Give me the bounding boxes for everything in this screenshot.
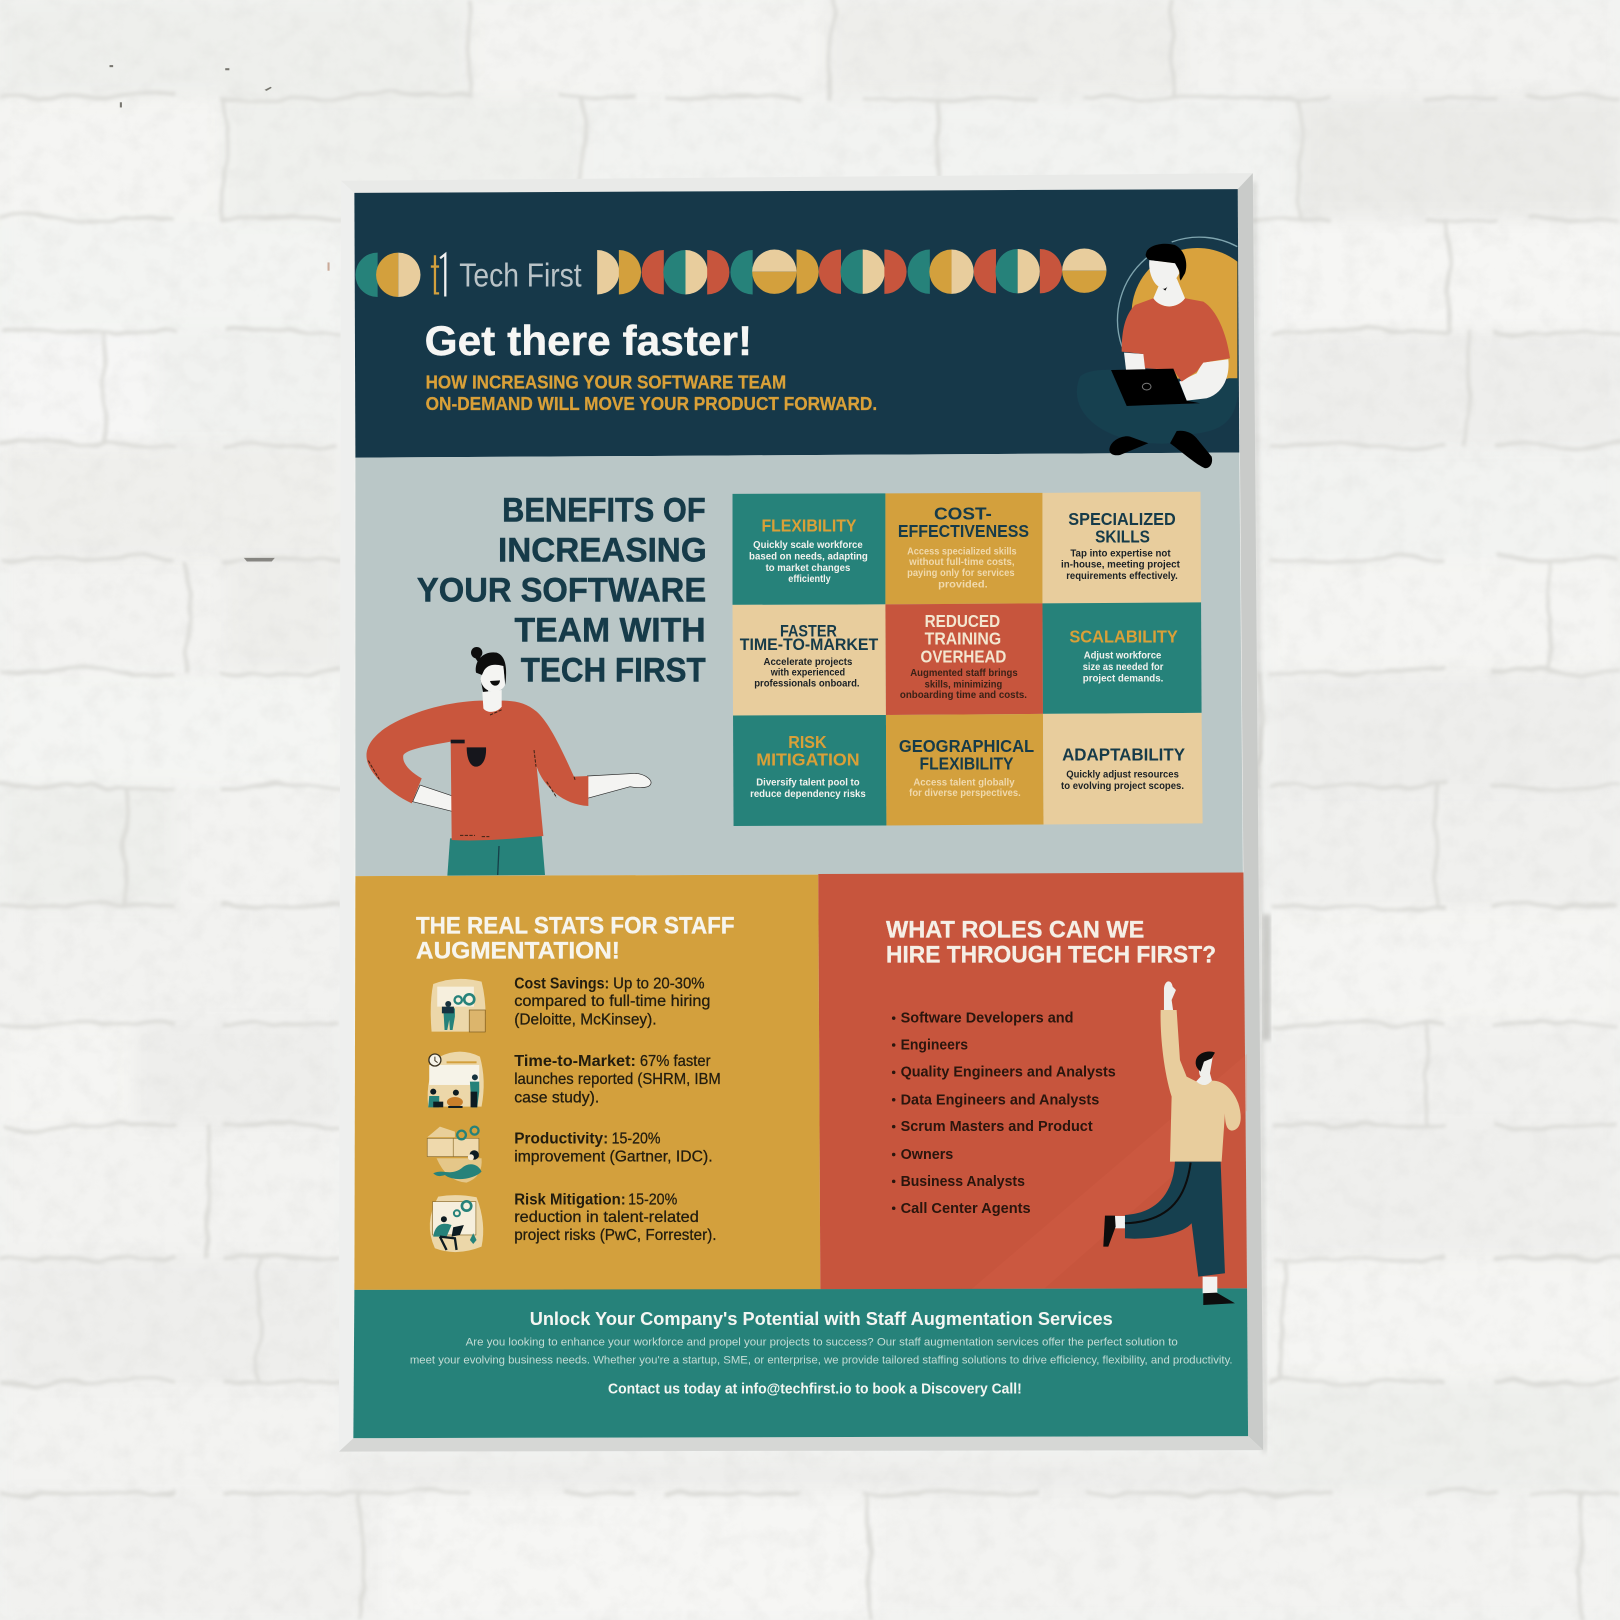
footer heading: Unlock Your Company's Potential with Staff Augmentation Services	[530, 1308, 1113, 1329]
heading: roles: HIRE THROUGH TECH FIRST?	[886, 942, 1216, 969]
roles panel background	[818, 873, 1247, 1289]
decorative circle row	[597, 248, 1107, 294]
roles list: Business Analysts	[901, 1174, 1025, 1190]
footer description: meet your evolving business needs. Whether you're a startup, SME, or enterprise, we provide tailored staffing solutions to drive efficiency, flexibility, and productivity.	[410, 1354, 1233, 1366]
contact line: Contact us today at info@techfirst.io to book a Discovery Call!	[608, 1381, 1022, 1397]
arm left	[1124, 353, 1145, 370]
sweater	[366, 701, 588, 840]
legs	[1077, 370, 1238, 444]
cell: faster time-to-market: TIME-TO-MARKET	[740, 635, 878, 654]
stat: cost savings: Up to 20-30%	[613, 975, 705, 992]
stat: productivity: improvement (Gartner, IDC).	[514, 1149, 713, 1166]
mouth	[1161, 287, 1167, 291]
hair	[1146, 244, 1186, 281]
roles panel light streak	[971, 1054, 1247, 1289]
logo	[355, 253, 582, 297]
header panel	[354, 189, 1239, 458]
cell: risk mitigation: reduce dependency risks	[750, 789, 866, 800]
roles list: Owners	[901, 1147, 953, 1163]
cell: reduced training overhead	[885, 603, 1043, 715]
heading: benefits: INCREASING	[498, 532, 707, 570]
cell: scalability: size as needed for	[1083, 662, 1163, 673]
left hand	[413, 785, 467, 812]
shirt	[1122, 298, 1230, 382]
stat: risk mitigation: project risks (PwC, Forrester).	[514, 1227, 716, 1244]
roles list: Call Center Agents	[901, 1201, 1031, 1217]
cell: adaptability: to evolving project scopes.	[1061, 781, 1184, 792]
illustration: man raising hand	[1103, 981, 1241, 1305]
benefits grid	[733, 492, 1203, 826]
logo circle	[376, 253, 420, 297]
illustration: man gesturing	[366, 647, 651, 876]
neck	[482, 690, 502, 712]
cell: scalability	[1042, 602, 1202, 714]
cell: risk mitigation: Diversify talent pool to	[756, 778, 860, 789]
cell: scalability: Adjust workforce	[1084, 651, 1161, 662]
heading: stats: THE REAL STATS FOR STAFF	[416, 912, 735, 939]
cell: risk mitigation: MITIGATION	[756, 750, 860, 770]
cell: specialized skills	[1042, 492, 1201, 603]
gold circle	[1132, 248, 1237, 379]
stat: time-to-market: 67% faster	[640, 1053, 711, 1070]
face	[1149, 260, 1179, 289]
cell: specialized skills: SPECIALIZED	[1068, 509, 1176, 529]
stats panel background	[354, 875, 820, 1290]
heading: benefits: TECH FIRST	[521, 652, 706, 690]
cell: flexibility	[733, 493, 885, 605]
cell: cost-effectiveness: EFFECTIVENESS	[898, 521, 1029, 541]
subtitle: ON-DEMAND WILL MOVE YOUR PRODUCT FORWARD.	[426, 393, 877, 414]
stat: productivity	[514, 1130, 713, 1166]
cell: cost-effectiveness	[885, 493, 1042, 604]
roles list: Scrum Masters and Product	[901, 1119, 1093, 1135]
cell: flexibility: FLEXIBILITY	[761, 516, 857, 536]
cell: flexibility: to market changes	[766, 563, 851, 574]
roles list	[892, 1011, 1116, 1217]
hair	[473, 652, 506, 685]
stat: cost savings: (Deloitte, McKinsey).	[514, 1011, 657, 1028]
cell: reduced training overhead: TRAINING	[925, 629, 1001, 649]
sweater	[1161, 1010, 1241, 1162]
thin ring	[1118, 237, 1237, 347]
cell: reduced training overhead: OVERHEAD	[921, 646, 1006, 666]
stat: cost savings: compared to full-time hiring	[514, 993, 711, 1010]
heading: stats	[416, 912, 735, 964]
cell: risk mitigation: RISK	[788, 732, 827, 752]
right hand	[587, 773, 651, 798]
cell: geographical flexibility: for diverse perspectives.	[909, 788, 1021, 799]
sweater details	[368, 709, 575, 837]
cell: specialized skills: Tap into expertise not	[1070, 548, 1171, 559]
cell: scalability: SCALABILITY	[1069, 627, 1178, 647]
cell: scalability: project demands.	[1083, 673, 1163, 684]
roles list: Engineers	[901, 1038, 968, 1054]
cell: specialized skills: requirements effectively.	[1066, 571, 1178, 582]
stat: risk mitigation	[514, 1191, 716, 1244]
stat: time-to-market: Time-to-Market:	[514, 1053, 636, 1070]
cell: faster time-to-market	[733, 604, 886, 715]
stat: cost savings: Cost Savings:	[514, 975, 609, 992]
cell: faster time-to-market: Accelerate projects	[764, 657, 853, 668]
cell: cost-effectiveness: Access specialized skills	[907, 546, 1017, 557]
roles list: Quality Engineers and Analysts	[901, 1065, 1116, 1081]
icon: time-to-market	[428, 1052, 484, 1108]
roles list: Data Engineers and Analysts	[901, 1092, 1099, 1108]
cell: flexibility: efficiently	[788, 574, 831, 585]
face	[481, 665, 505, 692]
hair	[1196, 1051, 1215, 1072]
stat: risk mitigation: Risk Mitigation:	[514, 1191, 626, 1208]
front sock and shoe	[1203, 1277, 1217, 1293]
cell: geographical flexibility: GEOGRAPHICAL	[899, 736, 1034, 756]
laptop	[1111, 369, 1200, 406]
cell: faster time-to-market: FASTER	[780, 621, 837, 640]
subtitle: HOW INCREASING YOUR SOFTWARE TEAM	[426, 371, 786, 392]
stat: cost savings	[514, 975, 711, 1028]
stat: time-to-market: case study).	[514, 1089, 599, 1106]
logo half circle	[355, 253, 378, 297]
poster	[353, 189, 1248, 1438]
stat: productivity: Productivity:	[514, 1130, 608, 1147]
hair behind neck	[481, 680, 488, 693]
cell: geographical flexibility	[886, 714, 1043, 825]
stat: productivity: 15-20%	[612, 1130, 661, 1147]
stats list	[514, 975, 721, 1244]
cell: adaptability	[1043, 713, 1203, 824]
arm right	[1179, 359, 1229, 401]
cell: geographical flexibility: Access talent globally	[913, 778, 1015, 789]
heading: benefits: BENEFITS OF	[502, 492, 706, 530]
logo mark	[431, 254, 445, 297]
cell: cost-effectiveness: paying only for services	[907, 568, 1015, 579]
cell: specialized skills: SKILLS	[1095, 526, 1150, 546]
raised hand	[1164, 981, 1176, 1012]
heading: roles: WHAT ROLES CAN WE	[886, 917, 1144, 944]
stat: time-to-market	[514, 1053, 721, 1106]
cell: flexibility: Quickly scale workforce	[753, 540, 863, 551]
footer text	[410, 1308, 1233, 1397]
cell: flexibility: based on needs, adapting	[749, 551, 868, 562]
stat: risk mitigation: reduction in talent-related	[514, 1209, 699, 1226]
footer panel background	[353, 1288, 1248, 1438]
cell: faster time-to-market: with experienced	[770, 668, 845, 679]
heading: benefits	[417, 492, 707, 690]
cell: adaptability: ADAPTABILITY	[1062, 744, 1185, 764]
cell: cost-effectiveness: without full-time costs,	[908, 557, 1015, 568]
pocket	[467, 747, 486, 767]
stat: risk mitigation: 15-20%	[628, 1191, 677, 1208]
poster frame	[339, 173, 1263, 1452]
cell: geographical flexibility: FLEXIBILITY	[920, 754, 1014, 774]
mouth	[490, 680, 500, 686]
footer description: Are you looking to enhance your workforce and propel your projects to success? Our staff augmentation services offer the perfect solution to	[466, 1337, 1178, 1349]
cell: reduced training overhead: Augmented staff brings	[910, 668, 1018, 679]
illustration: man with laptop	[1077, 237, 1238, 468]
heading: stats: AUGMENTATION!	[416, 937, 620, 964]
cell: cost-effectiveness: provided.	[938, 579, 988, 590]
cell: reduced training overhead: skills, minimizing	[925, 680, 1002, 691]
heading: roles	[886, 917, 1216, 969]
icon: risk mitigation	[430, 1195, 483, 1252]
neck and face	[1196, 1057, 1213, 1086]
back sock and shoe	[1115, 1216, 1126, 1228]
shoes	[1109, 431, 1212, 468]
pen	[451, 740, 465, 743]
stat: time-to-market: launches reported (SHRM, IBM	[514, 1071, 721, 1088]
title: Get there faster!	[425, 318, 752, 364]
roles list: Software Developers and	[901, 1011, 1073, 1027]
cell: reduced training overhead: onboarding time and costs.	[900, 690, 1027, 701]
cell: adaptability: Quickly adjust resources	[1066, 769, 1179, 780]
heading: benefits: TEAM WITH	[515, 612, 706, 650]
cell: reduced training overhead: REDUCED	[925, 611, 1000, 631]
heading: benefits: YOUR SOFTWARE	[417, 572, 706, 610]
cell: specialized skills: in-house, meeting project	[1061, 560, 1180, 571]
benefits panel background	[355, 453, 1243, 876]
cell: faster time-to-market: professionals onboard.	[754, 679, 860, 690]
frame shadow	[1252, 182, 1267, 1455]
footer description	[410, 1337, 1233, 1366]
trousers	[447, 835, 545, 876]
icon: productivity	[427, 1127, 482, 1183]
subtitle	[426, 371, 877, 414]
trousers	[1125, 1162, 1225, 1277]
icon: cost savings	[431, 979, 486, 1032]
brand name: Tech First	[459, 258, 582, 295]
cell: risk mitigation	[733, 715, 886, 826]
cell: cost-effectiveness: COST-	[934, 504, 992, 524]
neck	[1153, 278, 1185, 306]
